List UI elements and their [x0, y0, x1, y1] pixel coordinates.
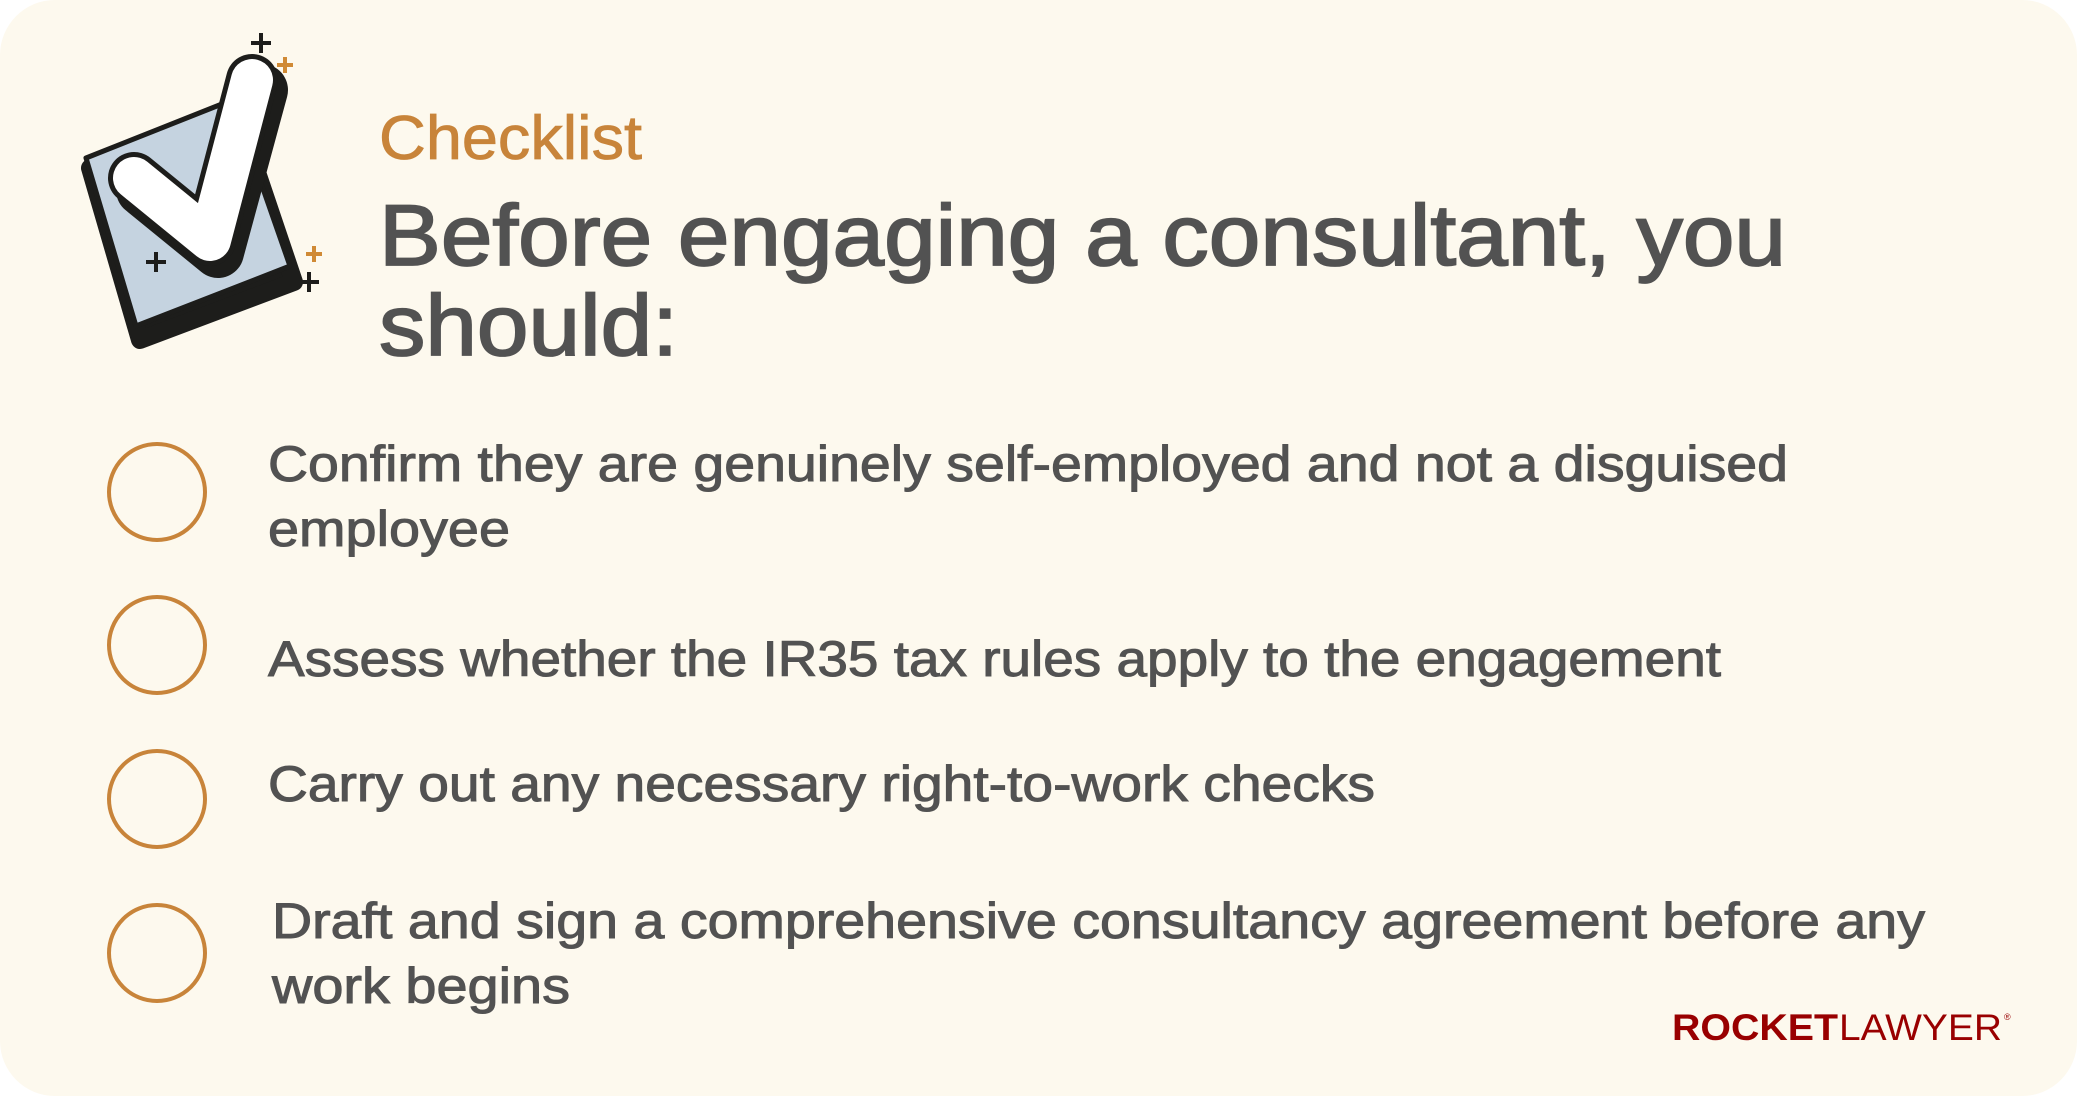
logo: Rocket Lawyer: ® [2004, 1012, 2011, 1022]
logo: Rocket Lawyer: LAWYER [1839, 1007, 2002, 1048]
title [379, 188, 1786, 374]
item 3 [109, 751, 1375, 847]
item 3: Carry out any necessary right-to-work checks [268, 756, 1375, 812]
title: should: [379, 278, 678, 374]
item 4: Draft and sign a comprehensive consultancy agreement before any [272, 893, 1925, 949]
item 1 [109, 436, 1788, 557]
item 4: work begins [271, 958, 570, 1014]
eyebrow: Checklist: Checklist [379, 104, 642, 173]
item 4 [109, 893, 1925, 1014]
item 2 [109, 597, 1721, 693]
item 2: Assess whether the IR35 tax rules apply to the engagement [268, 631, 1721, 687]
item 1: Confirm they are genuinely self-employed and not a disguised [268, 436, 1788, 492]
icon: checkbox with checkmark [86, 33, 322, 340]
checklist items [109, 436, 1925, 1014]
logo: Rocket Lawyer: ROCKET [1672, 1007, 1838, 1048]
logo: Rocket Lawyer [1672, 1007, 2011, 1048]
item 1: employee [268, 501, 510, 557]
title: Before engaging a consultant, you [379, 188, 1786, 284]
